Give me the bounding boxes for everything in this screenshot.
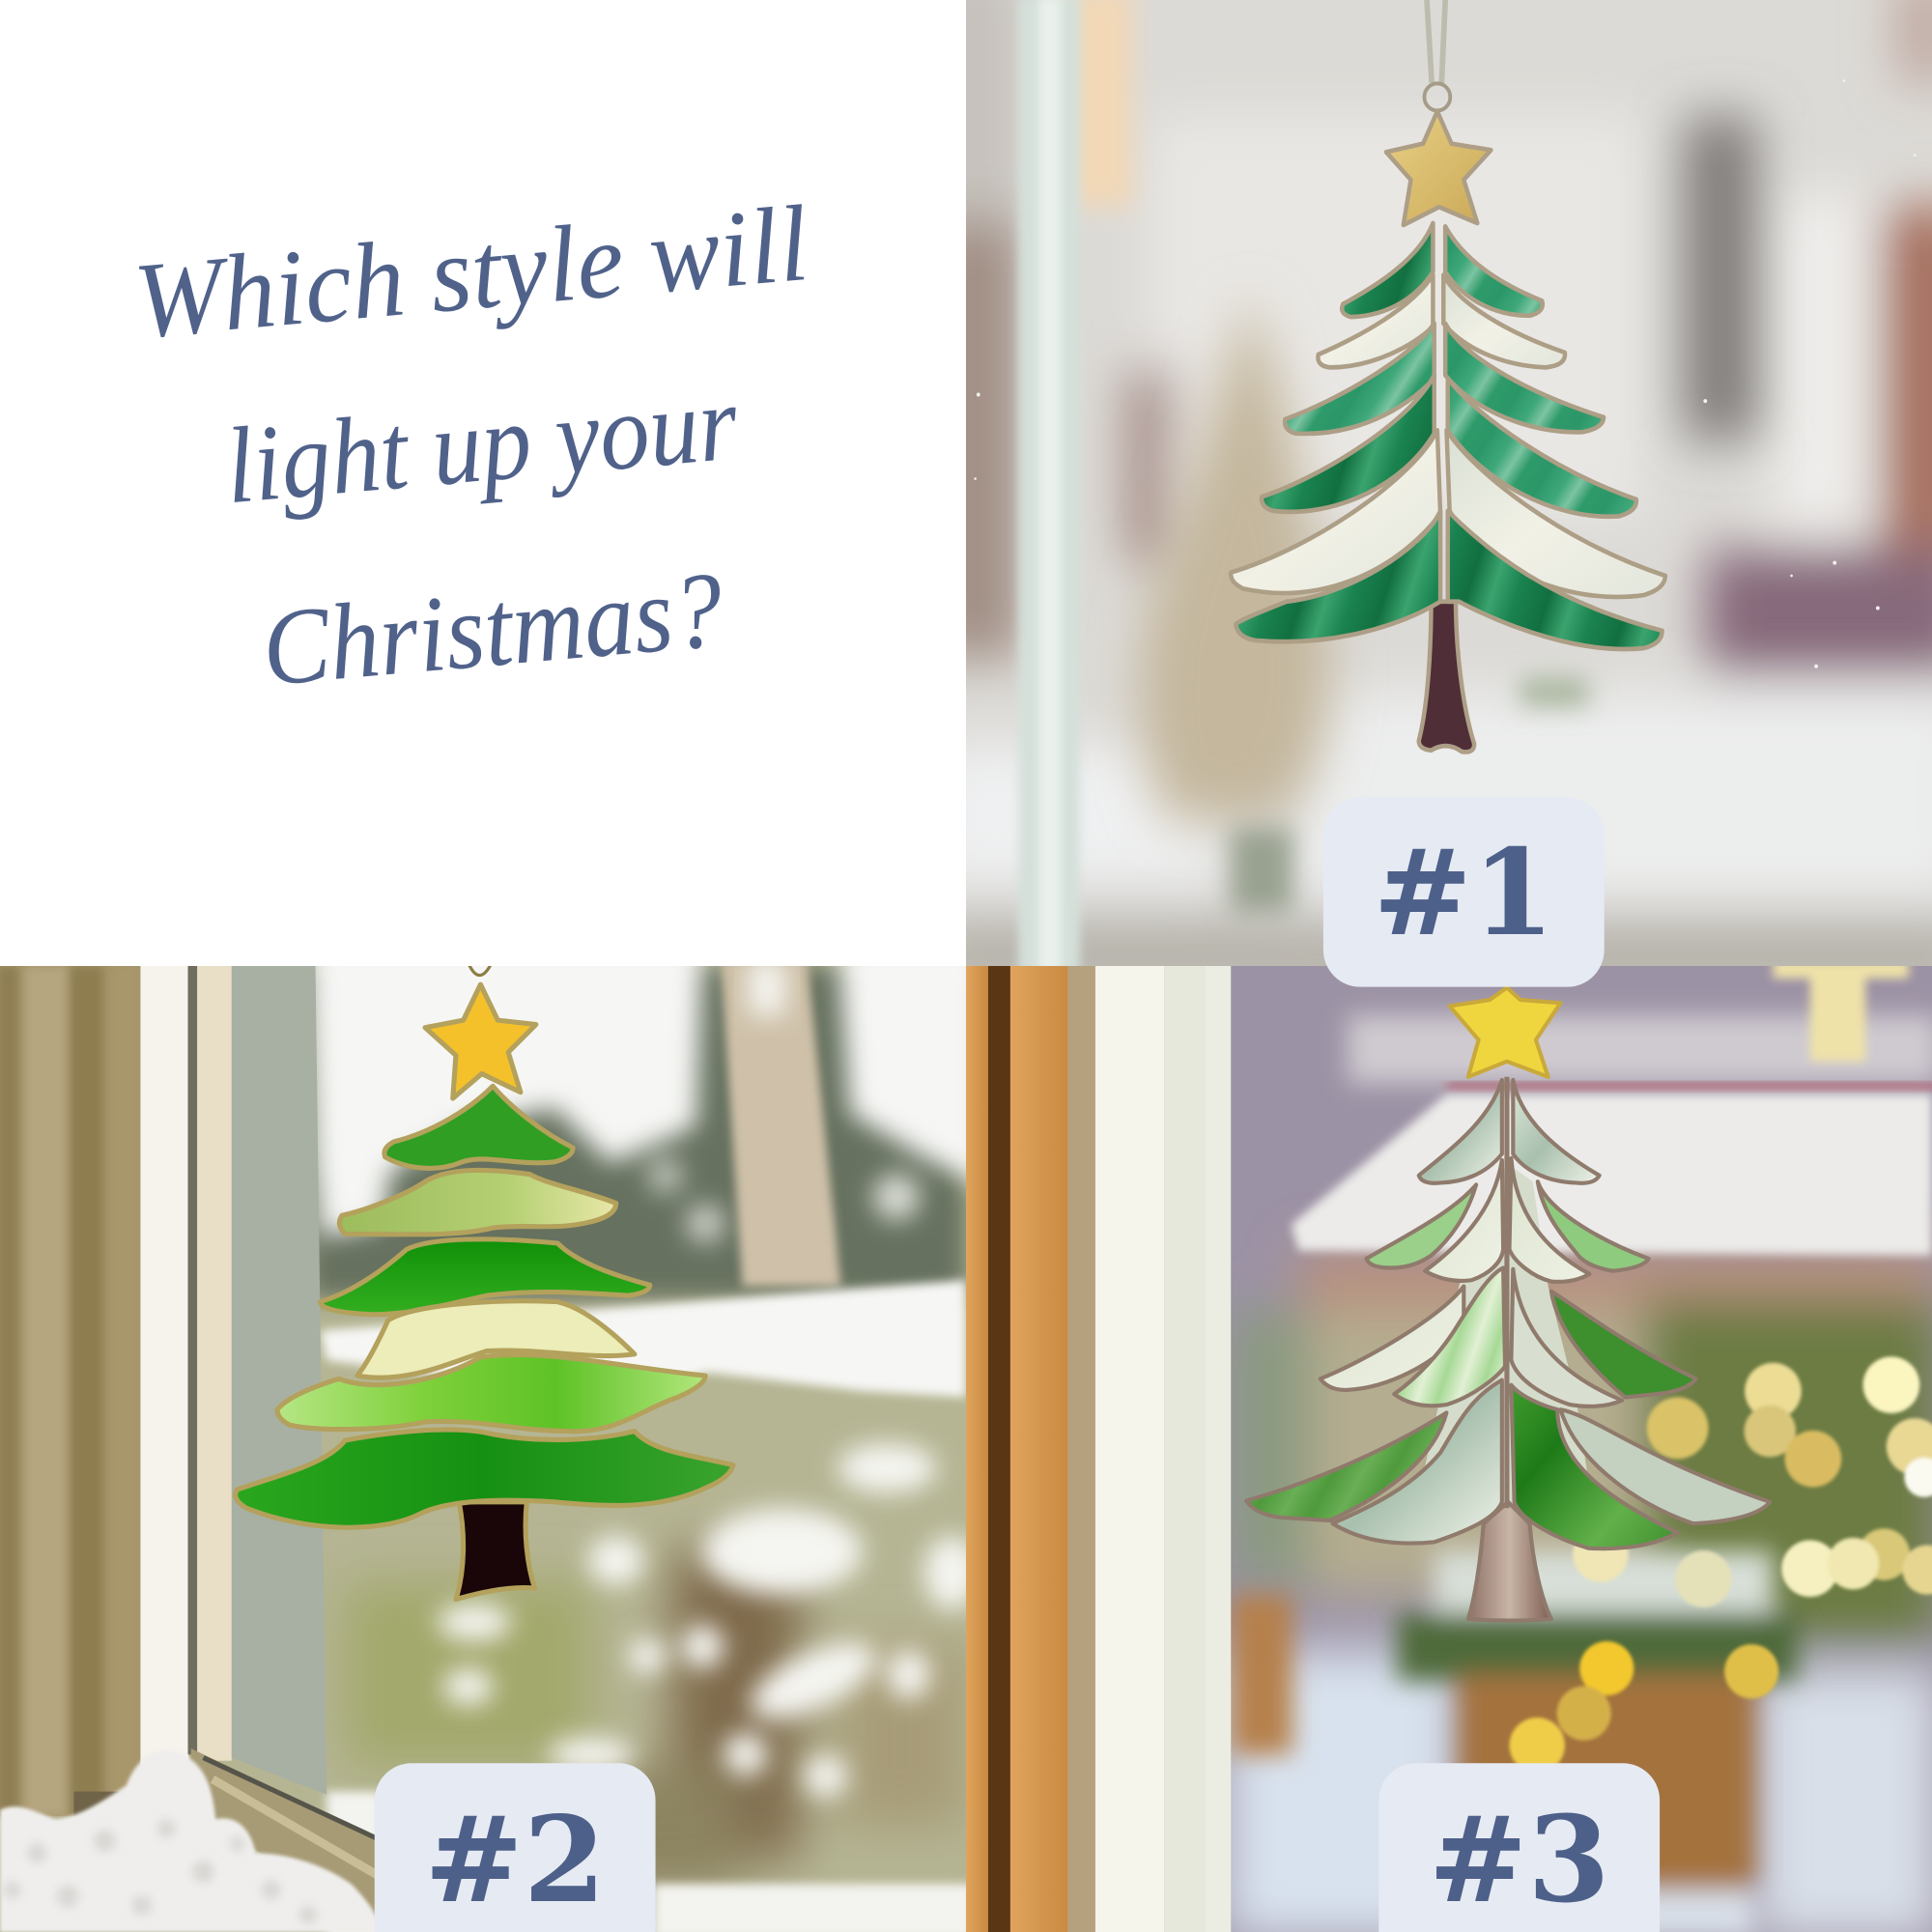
badge: number 2: #2 [424,1790,606,1929]
badge: number 1: #1 [1373,823,1554,962]
title: question text: Christmas? [258,550,727,709]
badge: number 1 [1323,797,1605,987]
badge: number 3: #3 [1429,1790,1610,1929]
illustration: stained glass tree 3 [1246,987,1770,1621]
title: question text [129,184,812,709]
icon: hanging cord [1427,0,1445,83]
illustration: stained glass tree 1 [1231,83,1665,752]
photo background: window with snowy garden [0,941,985,1932]
badge: number 3 [1378,1763,1660,1932]
panel: question [0,0,966,966]
panel: option 3 [966,960,1932,1932]
photo background: snowy window 1 [929,0,1932,996]
title: question text: Which style will [129,184,812,361]
badge: number 2 [375,1763,656,1932]
illustration: stained glass tree 2 [236,963,733,1600]
snow pile on sill [0,1750,382,1932]
panel: option 2 [0,941,985,1932]
photo background: cabin and bokeh lights [966,960,1932,1932]
panel: option 1 [929,0,1932,996]
title: question text: light up your [221,363,742,526]
